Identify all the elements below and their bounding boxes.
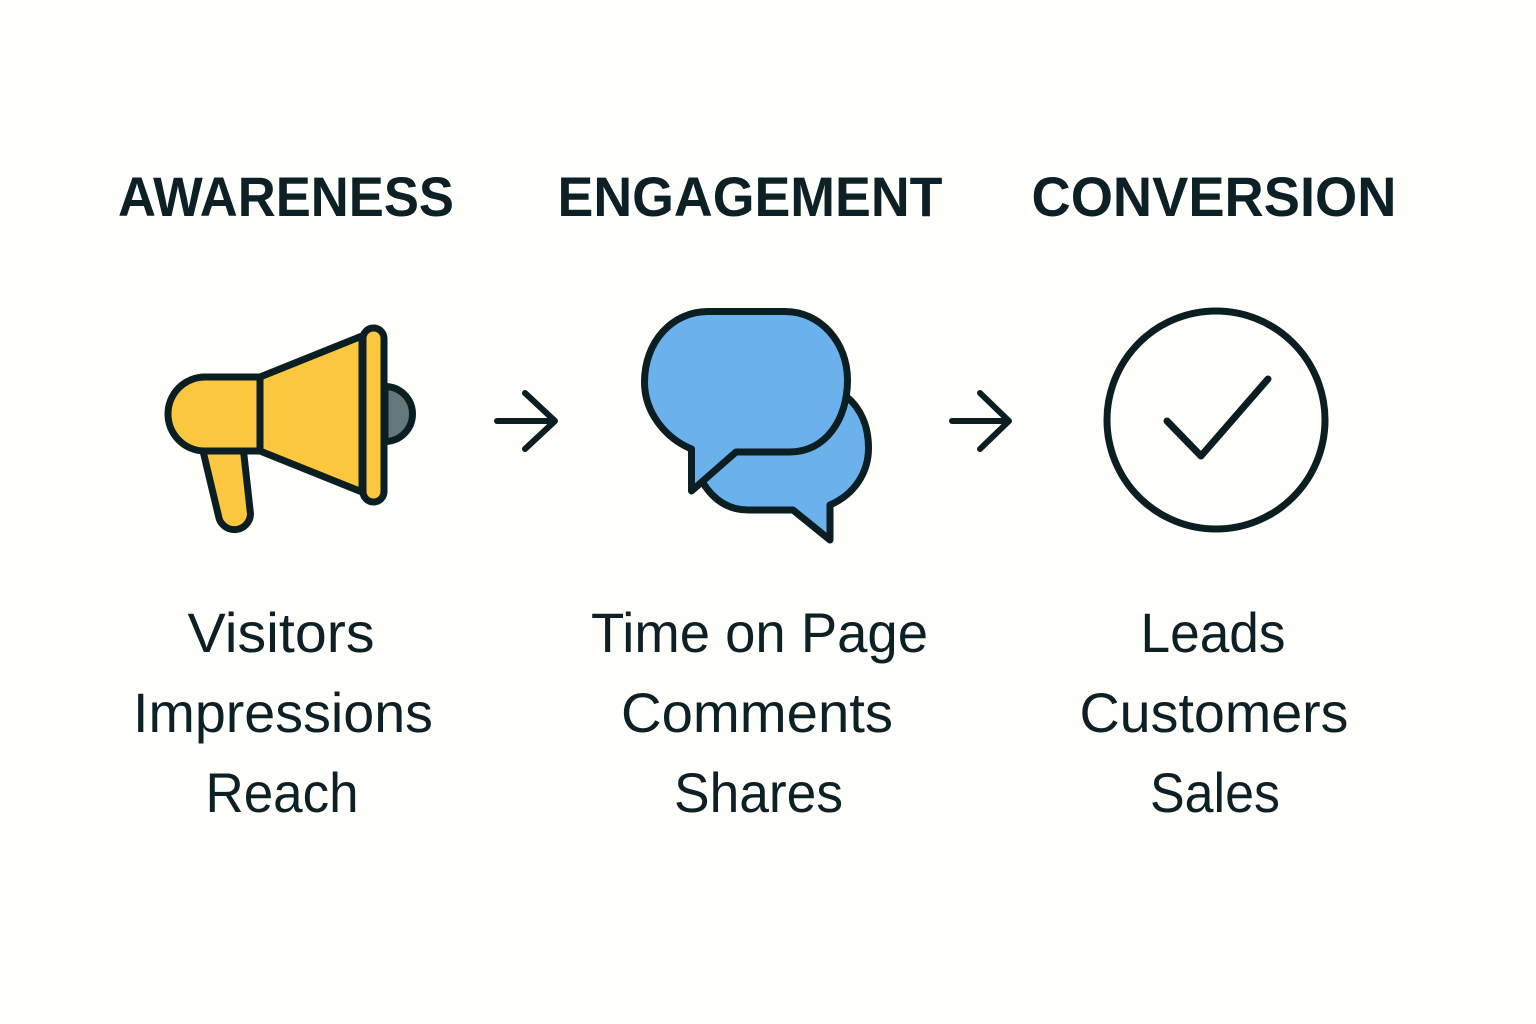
metrics: engagement: Time on Page <box>591 601 928 664</box>
metrics: awareness: Reach <box>206 761 358 824</box>
icon: check circle <box>1107 311 1325 529</box>
metrics: conversion <box>1080 601 1348 824</box>
heading: engagement: ENGAGEMENT <box>558 165 942 228</box>
icon: megaphone <box>168 328 412 530</box>
metrics: awareness: Visitors <box>188 601 374 664</box>
icon: chat bubbles <box>644 312 868 540</box>
metrics: conversion: Leads <box>1140 601 1286 664</box>
metrics: engagement: Comments <box>621 681 893 744</box>
metrics: awareness <box>133 601 433 824</box>
metrics: engagement: Shares <box>674 761 843 824</box>
heading: awareness: AWARENESS <box>118 165 454 228</box>
heading: conversion: CONVERSION <box>1032 165 1396 228</box>
arrow: awareness to engagement <box>497 393 555 449</box>
metrics: conversion: Customers <box>1080 681 1348 744</box>
metrics: engagement <box>591 601 928 824</box>
arrow: engagement to conversion <box>952 393 1009 449</box>
metrics: conversion: Sales <box>1150 761 1280 824</box>
metrics: awareness: Impressions <box>133 681 433 744</box>
